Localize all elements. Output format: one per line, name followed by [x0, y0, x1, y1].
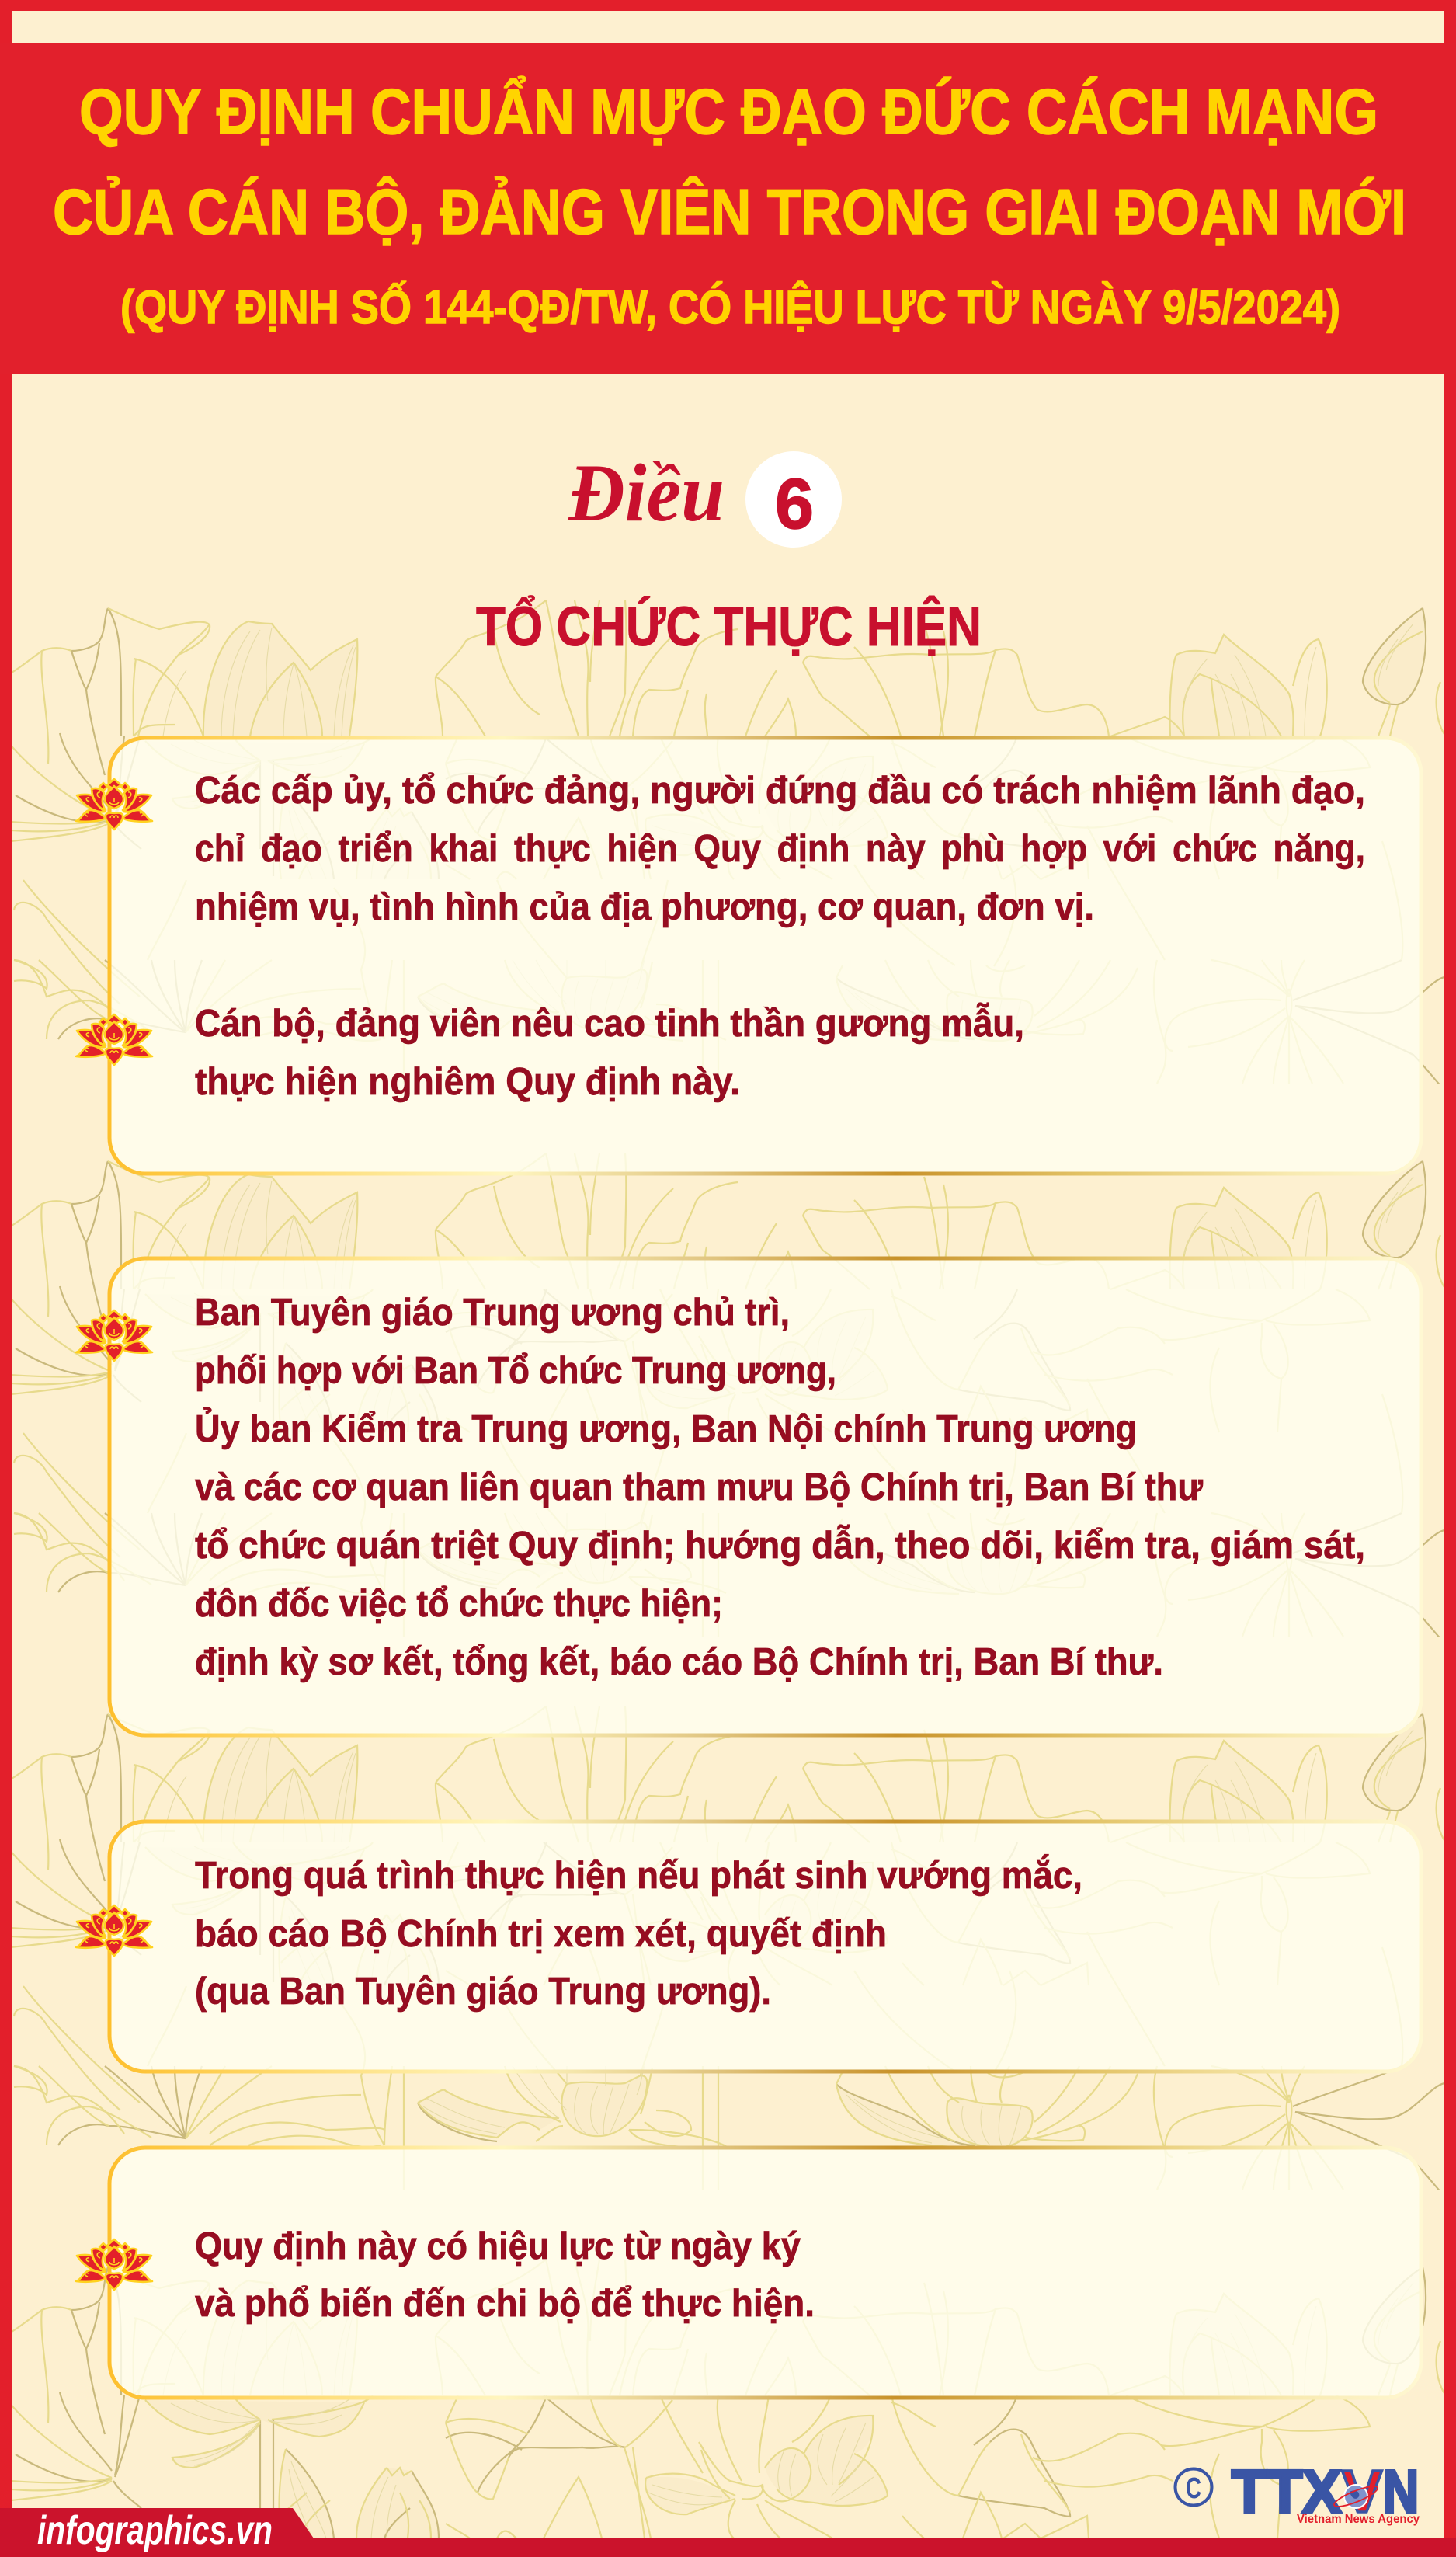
text block: định kỳ sơ kết, tổng kết, báo cáo Bộ Chính trị, Ban Bí thư.: [195, 1641, 1163, 1683]
text block: và phổ biến đến chi bộ để thực hiện.: [195, 2283, 815, 2325]
logo: TTXVN: V: [1342, 2458, 1382, 2525]
subtitle: (QUY ĐỊNH SỐ 144-QĐ/TW, CÓ HIỆU LỰC TỪ NGÀY 9/5/2024): [120, 281, 1340, 333]
icon: globe with orbit: [1333, 2482, 1379, 2510]
icon: lotus bullet: [76, 1905, 152, 1956]
number badge: 6: [775, 464, 814, 544]
text block: đôn đốc việc tổ chức thực hiện;: [195, 1583, 723, 1625]
icon: lotus bullet 2: [76, 1014, 152, 1065]
panel 1: responsibilities: [76, 738, 1421, 1174]
icon: lotus bullet: [76, 1310, 152, 1361]
background lotus line-art pattern: [4, 600, 1446, 2538]
text block: (qua Ban Tuyên giáo Trung ương).: [195, 1971, 771, 2013]
text block 1: Các cấp ủy, tổ chức đảng, người đứng đầu có trách nhiệm lãnh đạo,: [195, 770, 1365, 812]
text block: và các cơ quan liên quan tham mưu Bộ Chính trị, Ban Bí thư: [195, 1466, 1203, 1508]
icon: lotus bullet: [76, 2239, 152, 2290]
panel 4: effective date: [76, 2148, 1421, 2398]
text block: Quy định này có hiệu lực từ ngày ký: [195, 2225, 801, 2267]
section heading: TỔ CHỨC THỰC HIỆN: [476, 596, 982, 658]
text block: tổ chức quán triệt Quy định; hướng dẫn, theo dõi, kiểm tra, giám sát,: [195, 1525, 1365, 1567]
text block: [195, 1854, 1082, 2013]
source label: infographics.vn: [37, 2508, 273, 2553]
logo: TTXVN: Vietnam News Agency: [1297, 2513, 1420, 2526]
logo: TTXVN: [1176, 2458, 1420, 2526]
footer band: [0, 2508, 1456, 2557]
panel 2: Ban Tuyên giáo: [76, 1258, 1421, 1735]
text block 2: [195, 1003, 1024, 1103]
text block 2: thực hiện nghiêm Quy định này.: [195, 1061, 740, 1103]
text block: [195, 2225, 815, 2325]
text block 1: nhiệm vụ, tình hình của địa phương, cơ quan, đơn vị.: [195, 886, 1094, 928]
logo: TTXVN: N: [1383, 2458, 1419, 2525]
number badge: [745, 451, 842, 548]
text block: báo cáo Bộ Chính trị xem xét, quyết định: [195, 1913, 887, 1955]
text block 1: chỉ đạo triển khai thực hiện Quy định này phù hợp với chức năng,: [195, 828, 1365, 870]
text block: Trong quá trình thực hiện nếu phát sinh vướng mắc,: [195, 1854, 1082, 1897]
cream top strip: [12, 11, 1444, 43]
icon: copyright mark: [1176, 2468, 1211, 2506]
panel 3: reporting issues: [76, 1821, 1421, 2072]
text block 2: Cán bộ, đảng viên nêu cao tinh thần gương mẫu,: [195, 1003, 1024, 1045]
text block: phối hợp với Ban Tổ chức Trung ương,: [195, 1350, 836, 1392]
header banner: [0, 43, 1456, 374]
article label: Điều 6: [568, 447, 842, 548]
text block: Ban Tuyên giáo Trung ương chủ trì,: [195, 1292, 790, 1334]
logo: TTXVN: TTX: [1232, 2458, 1341, 2525]
word Điều: Điều: [568, 447, 725, 538]
text block: Ủy ban Kiểm tra Trung ương, Ban Nội chính Trung ương: [195, 1407, 1137, 1450]
text block 1: [195, 770, 1365, 928]
icon: lotus bullet 1: [76, 779, 152, 830]
text block: [195, 1292, 1365, 1683]
icon: copyright mark: C: [1186, 2472, 1201, 2505]
